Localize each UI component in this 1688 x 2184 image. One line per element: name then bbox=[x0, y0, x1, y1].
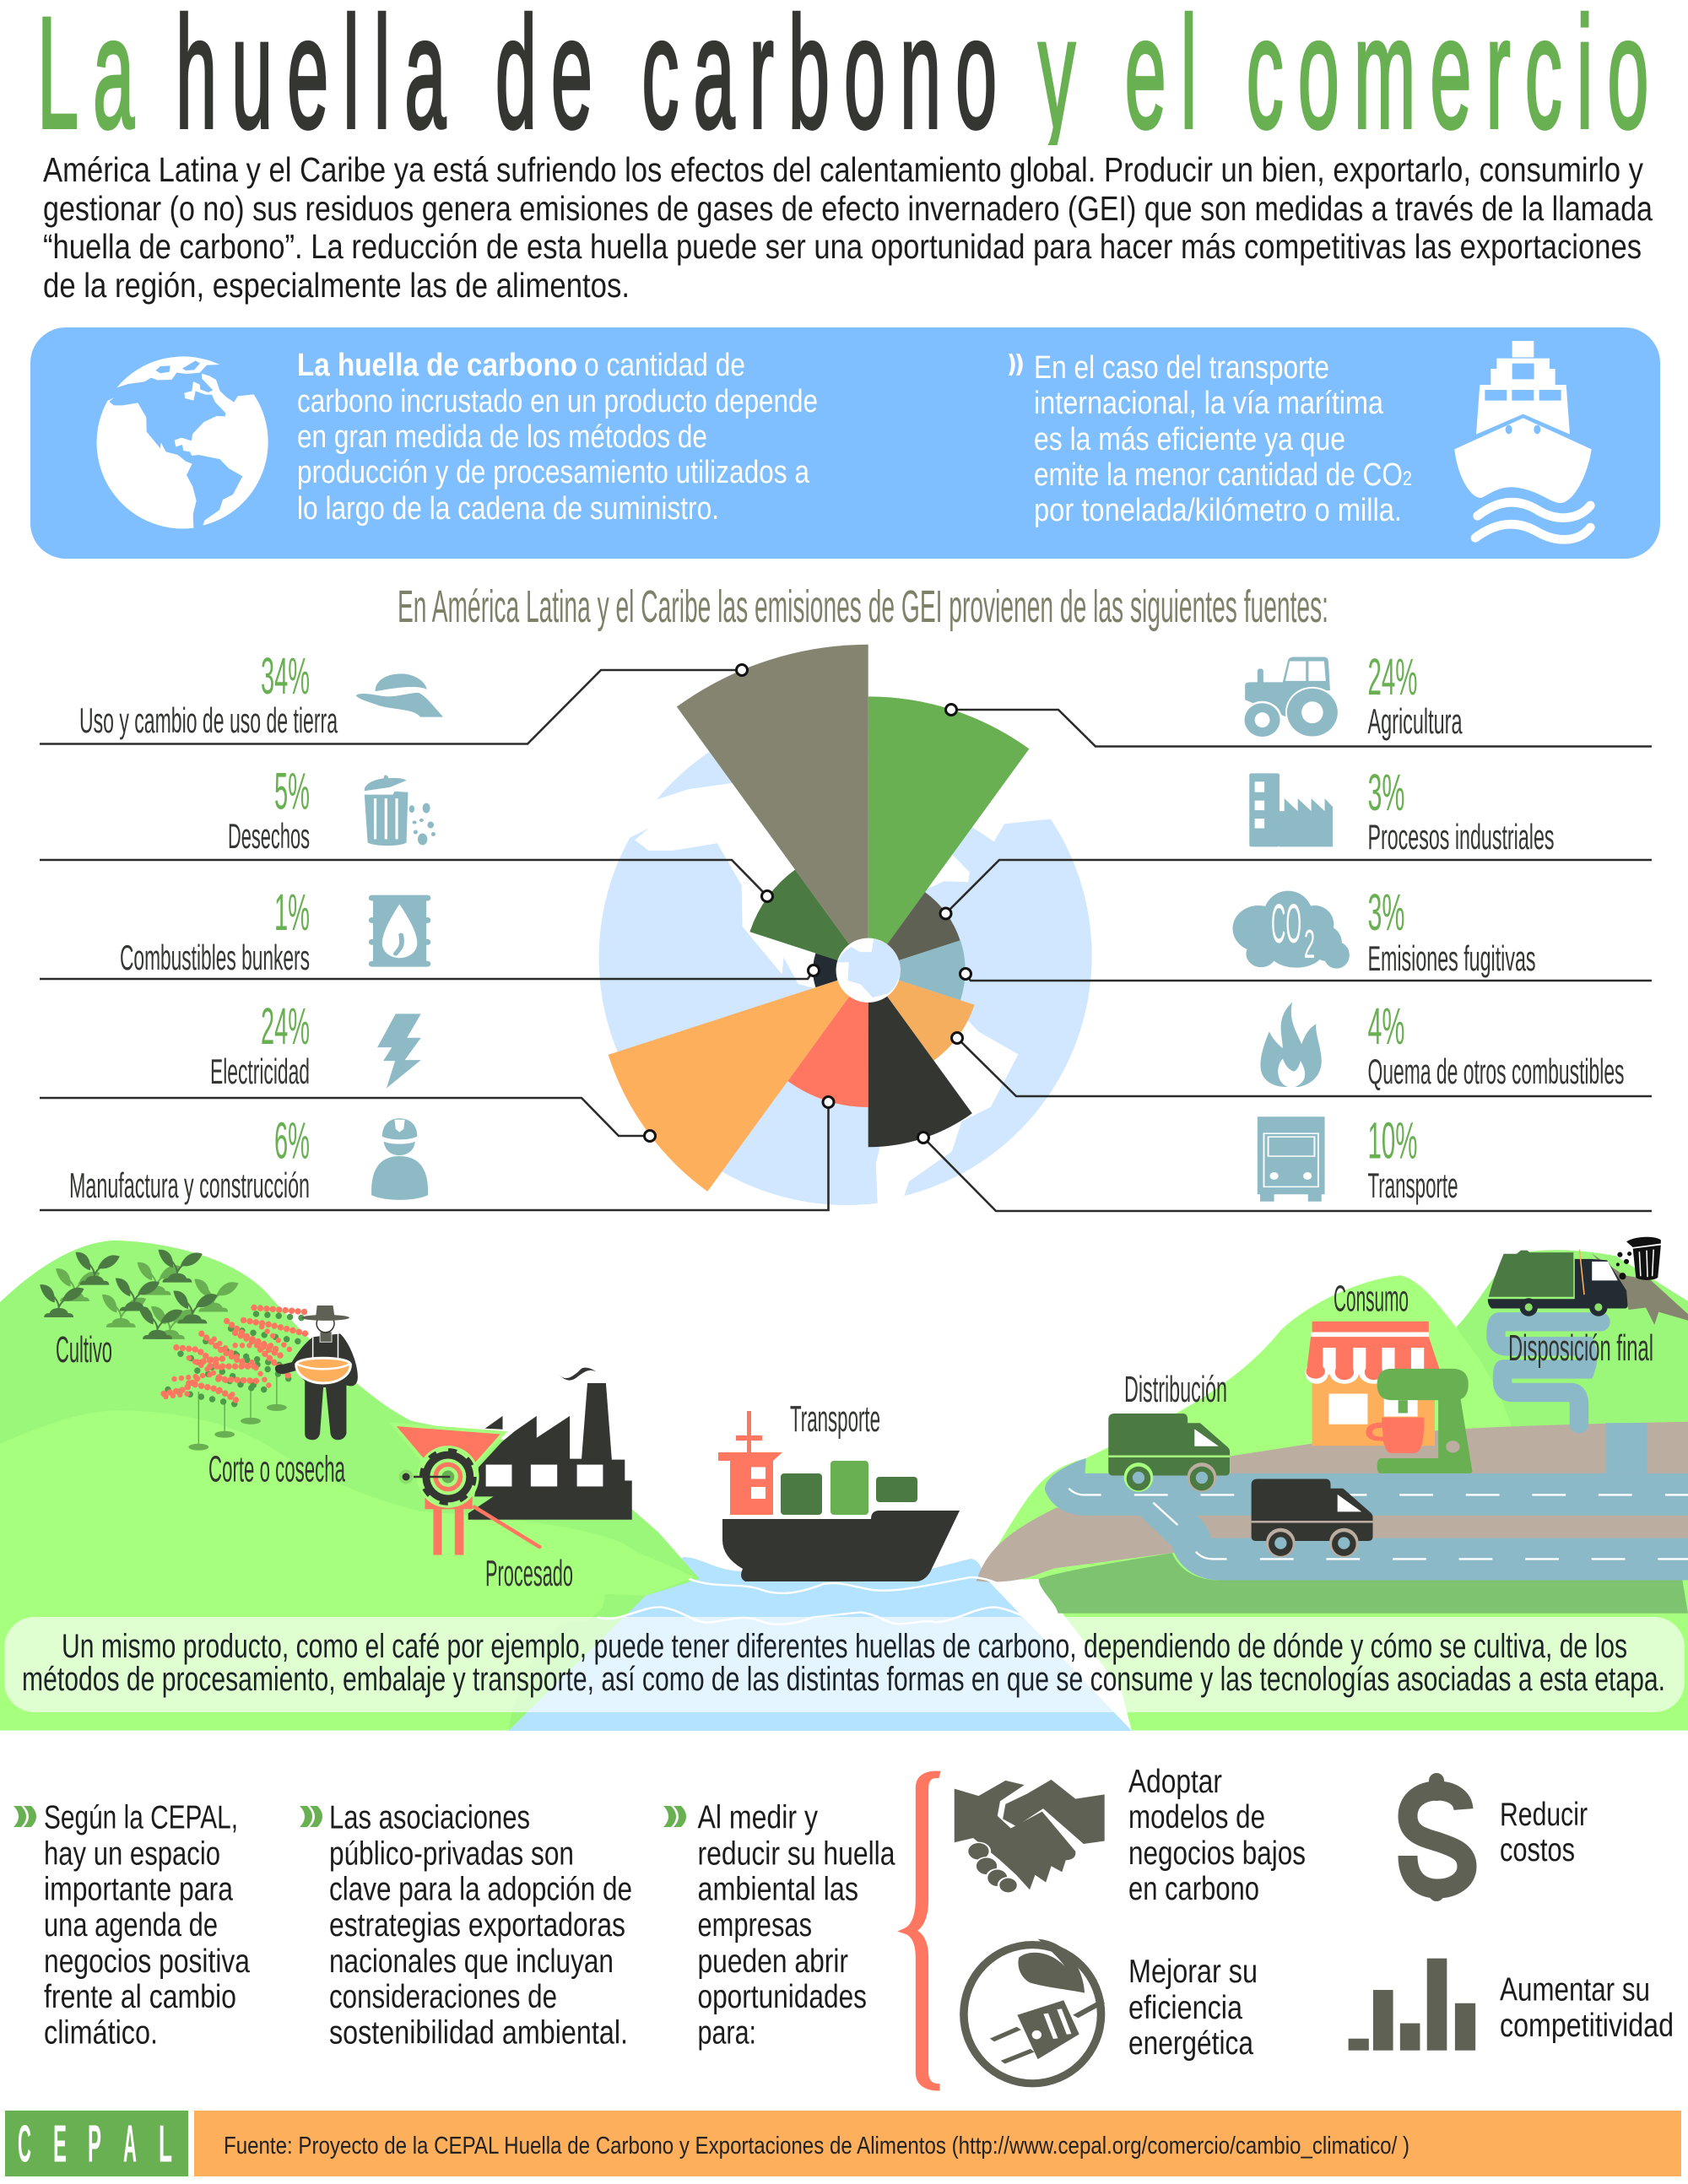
text: maritime transport: internacional, la vía marítima bbox=[1034, 386, 1384, 421]
text column: opportunities: ambiental las bbox=[697, 1872, 858, 1907]
intro text block: de la región, especialmente las de alimentos. bbox=[43, 266, 630, 305]
scene labels: Corte o cosecha bbox=[208, 1448, 345, 1490]
text: definition: producción y de procesamiento utilizados a bbox=[297, 455, 810, 490]
scene icons in left land bbox=[40, 1250, 632, 1555]
brace bbox=[909, 1775, 940, 2087]
icon: trash bin bbox=[365, 775, 436, 846]
label: 3% industrial processes: 3% bbox=[1367, 764, 1404, 821]
icon: CO2 cloud lettering: CO bbox=[1271, 892, 1301, 954]
label: 34% land use bbox=[79, 647, 338, 740]
icon: chevrons bbox=[14, 1806, 36, 1827]
icon: coffee plants bbox=[164, 1308, 311, 1451]
icon: tractor bbox=[1242, 657, 1339, 739]
panel: value chain landscape bbox=[0, 1237, 1688, 1731]
text: definition: en gran medida de los métodos de bbox=[297, 419, 707, 455]
footer: CEPAL logo: L bbox=[159, 2115, 172, 2174]
opportunities text: costos bbox=[1500, 1832, 1575, 1868]
text column: opportunities: oportunidades bbox=[697, 1979, 867, 2015]
label: 6% manufacturing: Manufactura y construcción bbox=[69, 1165, 310, 1205]
text column: CEPAL agenda: negocios positiva bbox=[44, 1943, 250, 1980]
text column: public-private partnerships bbox=[300, 1799, 632, 2051]
label: 3% fugitive emissions bbox=[1367, 884, 1536, 978]
icon: delivery van dark bbox=[1252, 1479, 1373, 1557]
icon: CO2 cloud lettering bbox=[1271, 892, 1315, 967]
scene labels: Transporte bbox=[790, 1398, 880, 1440]
road markings bbox=[1069, 1489, 1688, 1559]
text column: CEPAL agenda: climático. bbox=[44, 2015, 158, 2051]
label: 4% other fuels: 4% bbox=[1367, 997, 1404, 1055]
label: 34% land use: 34% bbox=[261, 647, 310, 705]
label: 34% land use: Uso y cambio de uso de tierra bbox=[79, 700, 338, 740]
icon: coffee grinder bbox=[392, 1424, 539, 1555]
label: 1% bunker fuels bbox=[120, 884, 310, 977]
text: 2 bbox=[1304, 922, 1315, 967]
opportunities text: Adoptar bbox=[1128, 1764, 1222, 1800]
label: 10% transport bbox=[1367, 1112, 1458, 1205]
text: maritime transport: es la más eficiente ya que bbox=[1034, 422, 1345, 457]
panel: blue definition band bbox=[30, 327, 1660, 559]
text column: opportunities: Al medir y bbox=[697, 1799, 818, 1836]
road-free waves bbox=[598, 1577, 1062, 1624]
intro text block bbox=[43, 150, 1653, 305]
opportunities text: modelos de bbox=[1128, 1799, 1265, 1835]
scene labels: Distribución bbox=[1124, 1369, 1227, 1410]
globe background bbox=[599, 710, 1092, 1205]
footer: CEPAL logo: P bbox=[88, 2115, 101, 2174]
icon: delivery van green bbox=[1108, 1414, 1230, 1492]
icon: black bin with waste bbox=[1616, 1237, 1661, 1280]
text column: public-private partnerships: consideraciones de bbox=[329, 1979, 557, 2015]
icon: truck bbox=[1258, 1116, 1325, 1202]
icon: garbage truck bbox=[1488, 1250, 1628, 1316]
text column: public-private partnerships: estrategias exportadoras bbox=[329, 1907, 625, 1943]
caption text bbox=[22, 1628, 1665, 1698]
roads bbox=[1045, 1458, 1688, 1516]
text column: CEPAL agenda: frente al cambio bbox=[44, 1979, 236, 2015]
scene labels: Consumo bbox=[1334, 1278, 1409, 1320]
footer: source bar bbox=[194, 2111, 1681, 2176]
icon: debris bbox=[1592, 1254, 1688, 1325]
text column: CEPAL agenda: hay un espacio bbox=[44, 1836, 220, 1872]
text: 1% bbox=[274, 884, 310, 941]
scene labels: Procesado bbox=[485, 1553, 573, 1594]
leader dots bbox=[645, 665, 971, 1143]
footer: CEPAL logo bbox=[5, 2111, 188, 2176]
opportunities text: Reducir bbox=[1500, 1797, 1588, 1833]
text column: opportunities: pueden abrir bbox=[697, 1943, 848, 1980]
text column: opportunities: reducir su huella bbox=[697, 1836, 895, 1872]
opportunities text: negocios bajos bbox=[1128, 1835, 1306, 1872]
right land bbox=[977, 1237, 1688, 1731]
opportunities icons bbox=[909, 1775, 1475, 2087]
icon: ship bbox=[1454, 341, 1592, 539]
footer: CEPAL logo: C bbox=[18, 2115, 31, 2174]
label: 3% fugitive emissions: 3% bbox=[1367, 884, 1404, 941]
translucent caption panel bbox=[4, 1617, 1685, 1712]
text: maritime transport: por tonelada/kilómetro o milla. bbox=[1034, 493, 1402, 528]
opportunities text bbox=[1128, 1764, 1674, 2062]
text: definition: carbono incrustado en un producto depende bbox=[297, 384, 818, 419]
text column: CEPAL agenda: importante para bbox=[44, 1872, 233, 1907]
icon: factory bbox=[1249, 773, 1333, 846]
text: definition: o cantidad de bbox=[584, 348, 745, 383]
opportunities text: Mejorar su bbox=[1128, 1954, 1258, 1990]
label: 10% transport: 10% bbox=[1367, 1112, 1418, 1170]
water bbox=[509, 1557, 1132, 1731]
icon: farmer bbox=[275, 1306, 358, 1440]
text column: opportunities: empresas bbox=[697, 1907, 812, 1943]
green strip bbox=[1039, 1553, 1688, 1614]
text: 5% bbox=[274, 763, 310, 820]
label: 24% electricity: Electricidad bbox=[210, 1051, 310, 1091]
centre mini globe bbox=[837, 939, 901, 997]
footer: CEPAL logo: E bbox=[53, 2115, 67, 2174]
label: 24% electricity bbox=[210, 997, 310, 1091]
icon: cargo ship bbox=[718, 1411, 960, 1581]
icon: chevrons bbox=[300, 1806, 322, 1827]
icon: worker bbox=[371, 1118, 428, 1200]
label: 3% industrial processes bbox=[1367, 764, 1555, 857]
icon: shop bbox=[1305, 1322, 1439, 1446]
opportunities text: en carbono bbox=[1128, 1871, 1259, 1907]
text: 6% bbox=[274, 1112, 310, 1170]
icon: hand with soil bbox=[355, 673, 444, 717]
text: definition: lo largo de la cadena de suministro. bbox=[297, 491, 719, 527]
label: 5% waste: Desechos bbox=[228, 816, 310, 856]
footer: CEPAL logo: A bbox=[123, 2115, 137, 2174]
text column: public-private partnerships: sostenibilidad ambiental. bbox=[329, 2015, 628, 2051]
label: 24% agriculture: Agricultura bbox=[1367, 701, 1463, 741]
icon: fuel barrel bbox=[369, 895, 430, 967]
text column: CEPAL agenda: Según la CEPAL, bbox=[44, 1799, 238, 1836]
text column: opportunities: para: bbox=[697, 2015, 756, 2051]
leader lines bbox=[40, 670, 1652, 1211]
icon: seedlings bbox=[40, 1250, 239, 1339]
icon: globe bbox=[97, 356, 268, 528]
rose wedges bbox=[609, 645, 1029, 1192]
icon: coffee machine bbox=[1366, 1369, 1472, 1473]
icon: factory bbox=[468, 1368, 632, 1520]
text column: CEPAL agenda bbox=[14, 1799, 250, 2051]
icons: right column bbox=[1232, 657, 1350, 1202]
icon: bars bbox=[1349, 1959, 1475, 2051]
footer: source bar: Fuente: Proyecto de la CEPAL Huella de Carbono y Exportaciones de Alimentos (http://www.cepal.org/comercio/cambio_climatico/ ) bbox=[224, 2133, 1409, 2160]
text: definition bbox=[297, 348, 818, 527]
text: maritime transport: emite la menor cantidad de CO2 bbox=[1034, 457, 1412, 493]
opportunities text: eficiencia bbox=[1128, 1990, 1242, 2026]
left land bbox=[0, 1241, 700, 1730]
label: 10% transport: Transporte bbox=[1367, 1165, 1458, 1205]
text: maritime transport: En el caso del transporte bbox=[1034, 350, 1329, 386]
chart: rose chart of emissions over globe bbox=[40, 645, 1652, 1211]
icon: plug with leaf bbox=[960, 1939, 1105, 2087]
label: 24% agriculture: 24% bbox=[1367, 648, 1418, 705]
label: 4% other fuels bbox=[1367, 997, 1624, 1091]
label: 1% bunker fuels: Combustibles bunkers bbox=[120, 938, 310, 977]
text column: public-private partnerships: clave para la adopción de bbox=[329, 1872, 632, 1907]
opportunities text: Aumentar su bbox=[1500, 1971, 1650, 2008]
label: 3% fugitive emissions: Emisiones fugitivas bbox=[1367, 938, 1536, 978]
icon: dollar sign bbox=[1408, 1781, 1467, 1894]
icon: chevrons bbox=[663, 1806, 686, 1827]
text column: opportunities bbox=[663, 1799, 895, 2051]
text column: CEPAL agenda: una agenda de bbox=[44, 1907, 218, 1943]
text column: public-private partnerships: Las asociaciones bbox=[329, 1799, 530, 1836]
icons: left column bbox=[355, 673, 444, 1200]
title bbox=[42, 10, 1647, 145]
text: definition: La huella de carbono bbox=[297, 348, 577, 383]
text: maritime transport bbox=[1034, 350, 1412, 528]
text column: public-private partnerships: nacionales que incluyan bbox=[329, 1943, 614, 1980]
icon: lightning bolt bbox=[377, 1014, 421, 1088]
icon: white chevrons bbox=[1009, 354, 1023, 376]
label: 6% manufacturing bbox=[69, 1112, 310, 1205]
label: 24% agriculture bbox=[1367, 648, 1463, 741]
icon: flame bbox=[1260, 1002, 1322, 1087]
label: 5% waste bbox=[228, 763, 310, 856]
scene labels: Cultivo bbox=[56, 1329, 112, 1370]
icon: handshake bbox=[955, 1780, 1105, 1893]
scene labels bbox=[56, 1278, 1653, 1594]
text: 24% bbox=[261, 997, 310, 1055]
text column: public-private partnerships: público-privadas son bbox=[329, 1836, 574, 1872]
opportunities text: energética bbox=[1128, 2025, 1253, 2062]
icon: CO2 cloud bbox=[1232, 891, 1350, 969]
